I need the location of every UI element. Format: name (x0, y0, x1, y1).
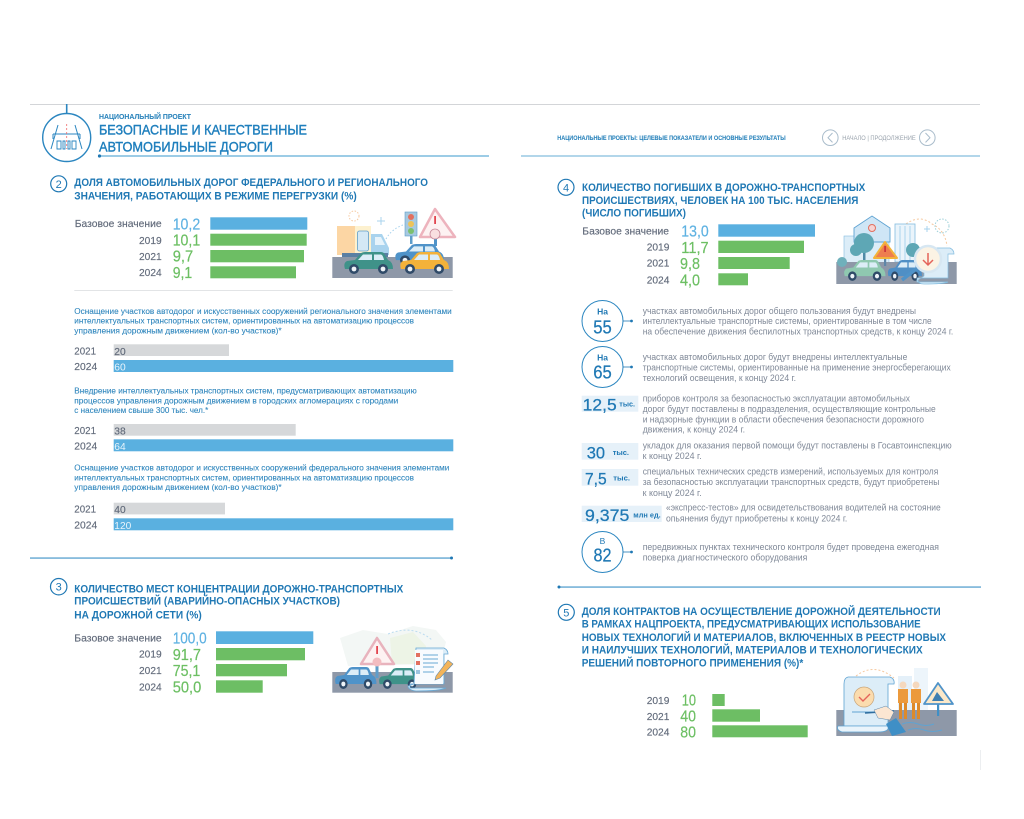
heading: ПРОИСШЕСТВИЯХ, ЧЕЛОВЕК НА 100 ТЫС. НАСЕЛЕНИЯ (582, 195, 858, 207)
panel: right page header (521, 130, 980, 157)
bar chart: 2019 (139, 649, 162, 661)
text block: regional roads: интеллектуальных транспортных систем, ориентированных на автоматизацию процессов (74, 316, 414, 326)
description: участках автомобильных дорог общего пользования будут внедрены (643, 306, 916, 316)
bar chart: 2021 (647, 258, 670, 270)
badge 7,5 (582, 469, 638, 488)
bar chart (74, 631, 313, 697)
heading: ПРОИСШЕСТВИЙ (АВАРИЙНО-ОПАСНЫХ УЧАСТКОВ) (74, 595, 340, 608)
description: за безопасностью эксплуатации транспортных средств, будут приобретены (643, 477, 939, 487)
heading: И НАИЛУЧШИХ ТЕХНОЛОГИЙ, МАТЕРИАЛОВ И ТЕХНОЛОГИЧЕСКИХ (582, 644, 923, 657)
description: приборов контроля за безопасностью эксплуатации автомобильных (643, 394, 911, 404)
panel: section 4 results list (582, 300, 953, 572)
bar chart: federal roads: 40 (114, 504, 126, 516)
bar chart: 91,7 (173, 647, 201, 664)
heading: ЗНАЧЕНИЯ, РАБОТАЮЩИХ В РЕЖИМЕ ПЕРЕГРУЗКИ (%) (74, 190, 357, 202)
bar chart: 2021 (139, 251, 162, 263)
bar chart: 2019 (139, 235, 162, 247)
badge 65: На (597, 353, 608, 363)
heading: КОЛИЧЕСТВО МЕСТ КОНЦЕНТРАЦИИ ДОРОЖНО-ТРАНСПОРТНЫХ (74, 583, 404, 595)
heading: ДОЛЯ АВТОМОБИЛЬНЫХ ДОРОГ ФЕДЕРАЛЬНОГО И РЕГИОНАЛЬНОГО (74, 177, 428, 189)
badge 82 (582, 532, 633, 572)
badge 55: На (597, 306, 608, 316)
badge 12,5: тыс. (619, 400, 635, 409)
illustration: traffic jam with truck (332, 209, 455, 278)
number badge 4 (558, 179, 574, 195)
bar chart: 2024 (647, 727, 670, 739)
badge 65 (582, 346, 633, 388)
item: 7,5 thousand instruments (582, 466, 939, 498)
number badge 5 (558, 604, 574, 620)
badge 82: 82 (594, 546, 612, 566)
badge 30: 30 (587, 443, 605, 462)
bar chart: 80 (680, 724, 696, 741)
badge 55: 55 (593, 317, 612, 337)
description: технологий освещения, к концу 2024 г. (643, 373, 796, 383)
text block: urban agglomerations: Внедрение интеллектуальных транспортных систем, предусматривающих автоматизацию (74, 386, 417, 396)
description: к концу 2024 г. (643, 451, 702, 461)
bar chart: 40 (680, 708, 696, 725)
panel: section 5 contracts share (558, 604, 981, 770)
description: дорог будут поставлены в подразделения, осуществляющие контрольные (643, 404, 936, 414)
text block: federal roads: Оснащение участков автодорог и искусственных сооружений федерального значения элементами (74, 462, 449, 472)
bar chart: 10,1 (173, 233, 200, 250)
description: на обеспечение движения беспилотных транспортных средств, к концу 2024 г. (643, 326, 953, 336)
number badge 2 (51, 176, 67, 192)
illustration: city and accident (836, 216, 957, 284)
badge 30 (582, 443, 638, 462)
bar chart: federal roads: 2021 (74, 503, 96, 515)
section divider (30, 556, 453, 560)
badge 7,5: 7,5 (585, 469, 607, 488)
badge 12,5: 12,5 (583, 396, 617, 415)
icon: next arrow (920, 130, 935, 146)
bar chart: 4,0 (680, 272, 700, 289)
text block: regional roads: Оснащение участков автодорог и искусственных сооружений регионального значения элементами (74, 306, 452, 316)
page edge mark (980, 750, 981, 770)
description: участках автомобильных дорог будут внедрены интеллектуальные (643, 352, 907, 362)
running title: НАЦИОНАЛЬНЫЕ ПРОЕКТЫ: ЦЕЛЕВЫЕ ПОКАЗАТЕЛИ И ОСНОВНЫЕ РЕЗУЛЬТАТЫ (557, 135, 786, 142)
bar chart: 9,1 (173, 265, 192, 282)
panel: section 4 road deaths (558, 179, 957, 289)
bar chart: federal roads: 120 (114, 520, 131, 532)
description: передвижных пунктах технического контроля будет проведена ежегодная (643, 542, 939, 552)
bar chart: 10,2 (173, 216, 200, 233)
divider (74, 290, 453, 291)
item: 55 road sections (582, 300, 953, 342)
heading (582, 182, 866, 220)
heading: КОЛИЧЕСТВО ПОГИБШИХ В ДОРОЖНО-ТРАНСПОРТНЫХ (582, 182, 866, 194)
bar chart: federal roads (74, 503, 453, 532)
bar chart: urban agglomerations: 2021 (74, 425, 96, 437)
description (666, 503, 941, 524)
heading (74, 177, 428, 202)
panel: section 3 dangerous road sections (50, 578, 453, 697)
item: 82 mobile inspection points (582, 532, 939, 572)
bar chart: 2019 (647, 242, 670, 254)
text block: urban agglomerations: процессов управления дорожным движением в городских агломерациях с городами (74, 396, 398, 406)
panel: ITS equipment indicators (74, 306, 453, 532)
description: специальных технических средств измерений, используемых для контроля (643, 466, 939, 476)
badge 9,375 (582, 506, 662, 525)
description: опьянения будут приобретены к концу 2024 г. (666, 514, 847, 524)
illustration: crash and checklist (332, 626, 453, 693)
header underline (521, 155, 980, 157)
project title: БЕЗОПАСНЫЕ И КАЧЕСТВЕННЫЕ (99, 122, 307, 137)
heading: (ЧИСЛО ПОГИБШИХ) (582, 208, 686, 220)
item: 12,5 thousand devices (582, 394, 936, 435)
bar chart: 100,0 (173, 631, 207, 648)
text block: federal roads (74, 462, 449, 492)
navigation label: НАЧАЛО | ПРОДОЛЖЕНИЕ (842, 135, 916, 142)
description (643, 394, 936, 435)
bar chart: regional roads (74, 344, 453, 374)
bar chart: regional roads: 2021 (74, 345, 96, 357)
worker figures (898, 682, 921, 719)
description: интеллектуальные транспортные системы, ориентированные в том числе (643, 316, 932, 326)
badge 65: 65 (593, 362, 612, 382)
header underline (98, 154, 489, 158)
project title: АВТОМОБИЛЬНЫЕ ДОРОГИ (99, 140, 273, 155)
panel: section 2 overloaded roads (51, 176, 455, 291)
text block: urban agglomerations: с населением свыше 300 тыс. чел.* (74, 405, 209, 415)
icon: previous arrow (822, 130, 838, 146)
heading: В РАМКАХ НАЦПРОЕКТА, ПРЕДУСМАТРИВАЮЩИХ ИСПОЛЬЗОВАНИЕ (582, 619, 921, 631)
text block: federal roads: управления дорожным движением (кол-во участков)* (74, 482, 282, 492)
bar chart: regional roads: 20 (114, 346, 126, 358)
bar chart: 2021 (647, 711, 670, 723)
number badge 3: 3 (56, 582, 62, 594)
description (643, 352, 951, 383)
description: транспортные системы, ориентированные на применение энергосберегающих (643, 362, 951, 372)
bar chart: 11,7 (681, 240, 709, 257)
badge 9,375: млн ед. (633, 511, 661, 520)
badge 12,5 (582, 396, 638, 415)
bar chart: urban agglomerations: 64 (114, 441, 126, 453)
icon: road emblem (43, 104, 91, 162)
bar chart: urban agglomerations: 38 (114, 426, 126, 438)
text block: regional roads (74, 306, 452, 336)
bar chart: 2024 (139, 267, 162, 279)
bar chart: urban agglomerations (74, 424, 453, 453)
bar chart (582, 224, 815, 289)
bar chart: 2021 (139, 665, 162, 677)
description (643, 440, 952, 461)
description: поверка диагностического оборудования (643, 553, 808, 563)
heading (74, 583, 404, 621)
bar chart: Базовое значение (75, 218, 162, 230)
bar chart: 10 (682, 693, 696, 710)
badge 82: В (600, 536, 606, 546)
badge 9,375: 9,375 (585, 506, 629, 525)
badge 30: тыс. (613, 448, 629, 457)
heading (582, 605, 947, 670)
project label: НАЦИОНАЛЬНЫЙ ПРОЕКТ (99, 112, 191, 121)
number badge 5: 5 (563, 607, 569, 619)
heading: РЕШЕНИЙ ПОВТОРНОГО ПРИМЕНЕНИЯ (%)* (582, 657, 804, 670)
item: 30 thousand first aid kits (582, 440, 952, 462)
bar chart: 2024 (647, 274, 670, 286)
top rule (30, 104, 980, 105)
project title (99, 122, 307, 155)
description: укладок для оказания первой помощи будут поставлены в Госавтоинспекцию (643, 440, 952, 450)
bar chart: 75,1 (173, 663, 200, 680)
text block: urban agglomerations (74, 386, 417, 415)
bar chart (647, 693, 808, 741)
description: и надзорные функции в области обеспечения безопасности дорожного (643, 414, 924, 424)
panel: project header (43, 104, 489, 162)
bar chart: regional roads: 2024 (74, 361, 97, 373)
bar chart: Базовое значение (74, 633, 162, 645)
illustration: document and road workers (836, 668, 957, 736)
badge 7,5: тыс. (613, 474, 630, 483)
bar chart: Базовое значение (582, 226, 669, 238)
bar chart: 9,8 (680, 256, 700, 273)
heading: ДОЛЯ КОНТРАКТОВ НА ОСУЩЕСТВЛЕНИЕ ДОРОЖНОЙ ДЕЯТЕЛЬНОСТИ (582, 605, 941, 618)
bar chart: urban agglomerations: 2024 (74, 440, 97, 452)
heading: НА ДОРОЖНОЙ СЕТИ (%) (74, 608, 202, 621)
item: 9,375 million tests (582, 503, 941, 525)
number badge 2: 2 (56, 179, 62, 191)
description (643, 466, 939, 498)
description: «экспресс-тестов» для освидетельствования водителей на состояние (666, 503, 941, 513)
bar chart: 9,7 (173, 249, 193, 266)
text block: regional roads: управления дорожным движением (кол-во участков)* (74, 326, 282, 336)
description (643, 306, 953, 336)
bar chart: 2019 (647, 695, 670, 707)
bar chart: federal roads: 2024 (74, 519, 97, 531)
item: 65 road sections (582, 346, 951, 388)
bar chart: regional roads: 60 (114, 362, 126, 374)
bar chart: 2024 (139, 681, 162, 693)
description (643, 542, 939, 563)
number badge 4: 4 (563, 182, 569, 194)
section divider (558, 586, 981, 588)
description: движения, к концу 2024 г. (643, 425, 745, 435)
bar chart: 50,0 (173, 680, 202, 697)
heading: НОВЫХ ТЕХНОЛОГИЙ И МАТЕРИАЛОВ, ВКЛЮЧЕННЫХ В РЕЕСТР НОВЫХ (582, 631, 947, 644)
number badge 3 (50, 578, 67, 595)
bar chart (75, 216, 307, 282)
badge 55 (582, 300, 633, 342)
description: к концу 2024 г. (643, 488, 702, 498)
bar chart: 13,0 (681, 224, 709, 241)
text block: federal roads: интеллектуальных транспортных систем, ориентированных на автоматизацию процессов (74, 472, 414, 482)
